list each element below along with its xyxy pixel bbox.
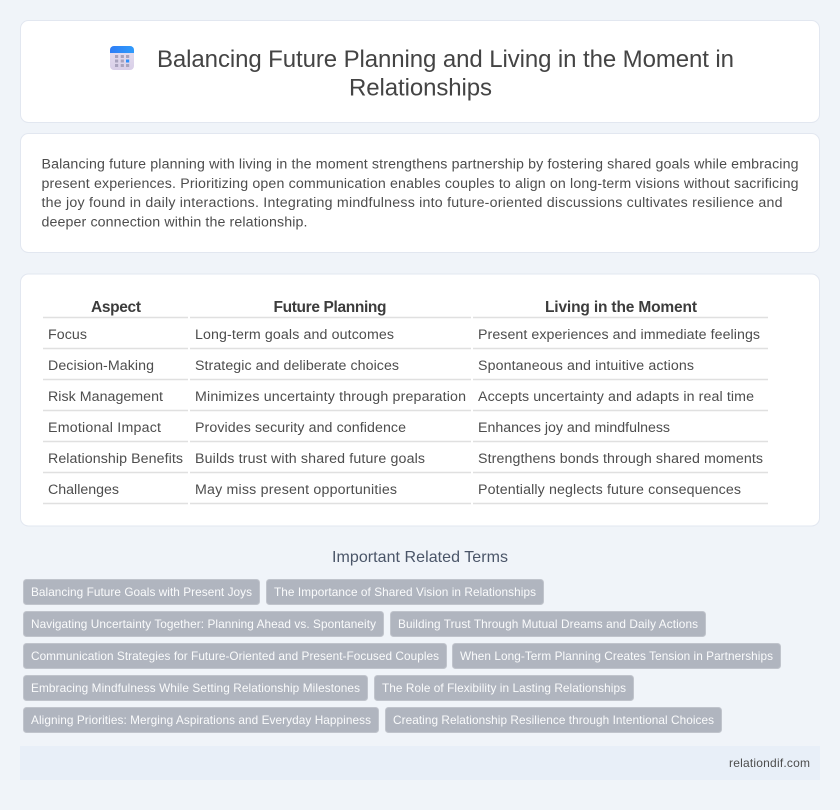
footer: relationdif.com <box>729 756 810 770</box>
table row: decision-making: Decision-Making <box>48 358 154 374</box>
tag: The Role of Flexibility in Lasting Relationships <box>382 681 626 695</box>
table row: challenges: Potentially neglects future consequences <box>478 482 741 498</box>
table row: challenges <box>48 482 741 498</box>
table row: risk management: Minimizes uncertainty through preparation <box>195 389 466 405</box>
tag: Embracing Mindfulness While Setting Relationship Milestones <box>31 681 360 695</box>
table row: decision-making: Strategic and deliberate choices <box>195 358 399 374</box>
tag <box>24 644 446 668</box>
table row: focus <box>48 327 760 343</box>
table header: Living in the Moment <box>545 299 697 316</box>
heading: important related terms: Important Related Terms <box>332 549 508 566</box>
tag: Navigating Uncertainty Together: Planning Ahead vs. Spontaneity <box>31 617 376 631</box>
tag: The Importance of Shared Vision in Relationships <box>274 585 536 599</box>
tag: Creating Relationship Resilience through Intentional Choices <box>393 713 714 727</box>
text block: description <box>42 156 798 230</box>
table row: emotional impact <box>48 420 670 436</box>
text block: description: deeper connection within the relationship. <box>42 214 308 230</box>
related terms tags <box>24 580 780 732</box>
table header: Future Planning <box>274 299 386 316</box>
table header: Aspect <box>91 299 141 316</box>
table row: emotional impact: Emotional Impact <box>48 420 161 436</box>
table row: emotional impact: Provides security and confidence <box>195 420 406 436</box>
table row: relationship benefits: Builds trust with shared future goals <box>195 451 425 467</box>
icon: calendar <box>110 46 134 70</box>
text block: description: Balancing future planning with living in the moment strengthens partnership by fostering shared goals while embracing <box>42 156 798 172</box>
table row: focus: Focus <box>48 327 87 343</box>
table header <box>91 299 697 316</box>
table row: challenges: Challenges <box>48 482 119 498</box>
tag <box>24 612 384 636</box>
tag <box>452 644 780 668</box>
text block: description: present experiences. Prioritizing open communication enables couples to align on long-term visions without sacrificing <box>42 176 798 192</box>
tag: Balancing Future Goals with Present Joys <box>31 585 252 599</box>
panel: header <box>20 20 820 122</box>
tag: Aligning Priorities: Merging Aspirations and Everyday Happiness <box>31 713 371 727</box>
table row: risk management: Risk Management <box>48 389 163 405</box>
table row: focus: Long-term goals and outcomes <box>195 327 394 343</box>
table row: relationship benefits: Strengthens bonds through shared moments <box>478 451 763 467</box>
tag: Communication Strategies for Future-Oriented and Present-Focused Couples <box>31 649 439 663</box>
table row: relationship benefits: Relationship Benefits <box>48 451 183 467</box>
tag <box>266 580 544 604</box>
table row: challenges: May miss present opportunities <box>195 482 397 498</box>
table row: risk management <box>48 389 754 405</box>
table row: decision-making: Spontaneous and intuitive actions <box>478 358 694 374</box>
tag <box>390 612 706 636</box>
tag <box>24 708 378 732</box>
footer <box>20 746 820 780</box>
table row: risk management: Accepts uncertainty and adapts in real time <box>478 389 754 405</box>
panel: comparison table <box>20 274 820 526</box>
table row: emotional impact: Enhances joy and mindfulness <box>478 420 670 436</box>
title: Relationships <box>349 74 492 102</box>
tag <box>386 708 722 732</box>
text block: description: the joy found in daily interactions. Integrating mindfulness into future-oriented discussions cultivates resilience and <box>42 195 782 211</box>
table row: relationship benefits <box>48 451 763 467</box>
tag: Building Trust Through Mutual Dreams and Daily Actions <box>398 617 698 631</box>
title: Balancing Future Planning and Living in the Moment in <box>157 46 734 73</box>
table row: decision-making <box>48 358 694 374</box>
tag <box>374 676 634 700</box>
title <box>157 46 734 102</box>
tag <box>24 676 368 700</box>
table row: focus: Present experiences and immediate feelings <box>478 327 760 343</box>
tag <box>24 580 260 604</box>
panel: description <box>20 134 820 252</box>
tag: When Long-Term Planning Creates Tension in Partnerships <box>460 649 773 663</box>
